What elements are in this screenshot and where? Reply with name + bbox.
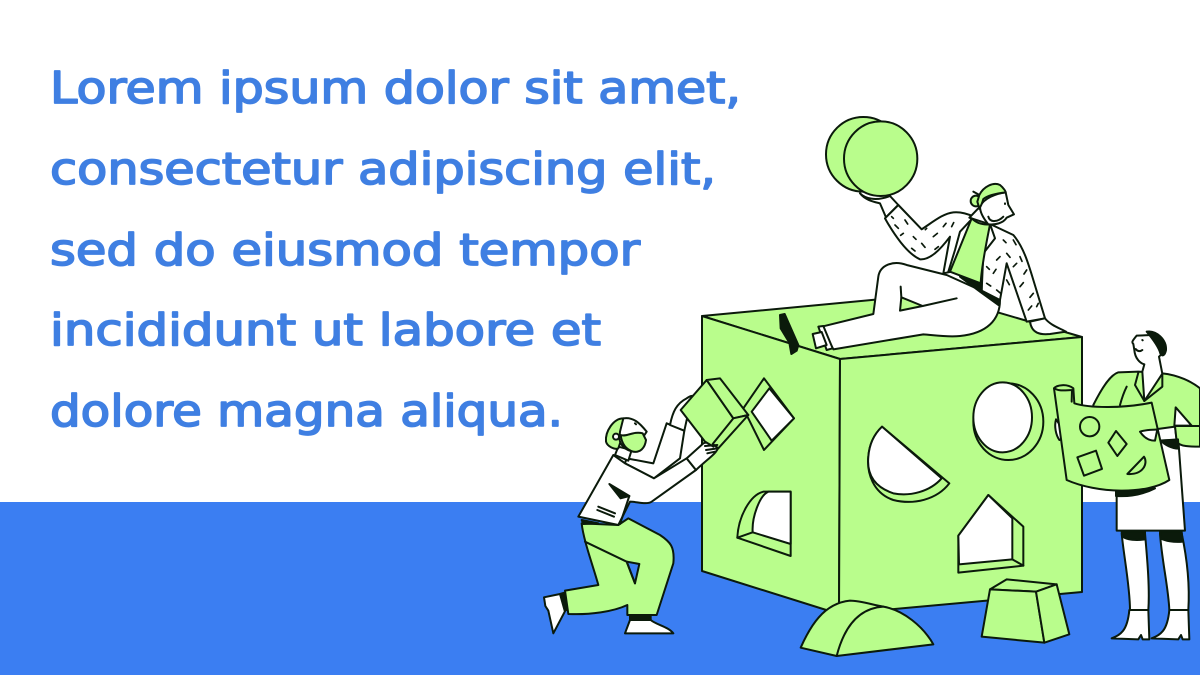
ball [826,117,917,196]
woman: head, hair and green top [950,184,1014,283]
man: jacket lapel and pocket [582,484,629,524]
woman: sleeve forearm [1175,426,1200,447]
woman: fingers behind poster [1055,419,1065,440]
poster shape: half circle [1127,457,1145,474]
cube holes and kneeling man [544,378,794,633]
woman: boots [1112,610,1189,639]
text block: lorem ipsum paragraph: consectetur adipiscing elit, [50,144,716,195]
man: green trousers [565,518,674,615]
man: white jacket [578,455,696,525]
woman: raised hand [860,193,898,217]
jacket speckle pattern [892,217,1038,310]
poster shape: diamond [1108,431,1127,456]
man: head with beard [606,418,647,461]
woman: head and neck [1132,331,1166,401]
text block: lorem ipsum paragraph [50,63,741,437]
blue floor band [0,502,1200,675]
woman holding a poster [1054,331,1200,639]
woman sitting on the cube [780,117,1066,354]
woman: black shoe [780,314,798,354]
cube holes: front face [801,382,1069,656]
floor gap between legs [627,562,639,583]
woman: legs [1122,532,1189,610]
woman: white gap under arm [1174,407,1192,426]
hole: circle [973,382,1043,460]
poster shadow [1116,488,1155,496]
woman: waist shadow [1161,439,1179,449]
block: dome [801,601,933,656]
woman: hand on cube [1030,318,1066,334]
text block: lorem ipsum paragraph: incididunt ut labore et [50,305,601,356]
woman: poster thumb [1140,429,1157,441]
hole: house [958,495,1023,573]
woman: white trousers [822,263,1000,349]
hole: diamond on left face [743,378,794,450]
man: fingers [705,445,717,453]
text block: lorem ipsum paragraph: Lorem ipsum dolor sit amet, [50,63,741,114]
woman: trouser cuff and ankle [813,326,833,350]
man: upper hand [670,396,695,431]
woman: collar lapels [1120,373,1162,405]
man: front shoe [625,615,673,633]
hole: half circle [868,427,949,502]
hole: arch on left face [737,492,791,556]
woman: forearm cuff and hand [1140,427,1177,441]
block: trapezoid [982,579,1069,643]
cube visible under the knee [900,297,923,311]
held block [681,378,748,448]
green shape-sorter cube [702,294,1082,614]
man: rear arm [625,423,684,478]
poster with shape drawings [1054,385,1169,491]
woman: green jacket [1093,372,1200,430]
woman: left patterned sleeve and jacket [885,205,974,273]
woman: white skirt [1117,440,1185,531]
woman: trouser creases [901,287,957,306]
man: back shoe [544,593,568,633]
text block: lorem ipsum paragraph: sed do eiusmod tempor [50,225,641,276]
woman: right patterned jacket [982,224,1045,322]
woman: belt [960,277,1000,305]
poster shape: square [1077,451,1102,476]
man: lower hand [687,443,718,470]
text block: lorem ipsum paragraph: dolore magna aliqua. [50,386,563,437]
man: trouser crease [585,542,635,583]
woman: jacket lapels [948,217,995,291]
poster shape: circle [1080,417,1099,436]
